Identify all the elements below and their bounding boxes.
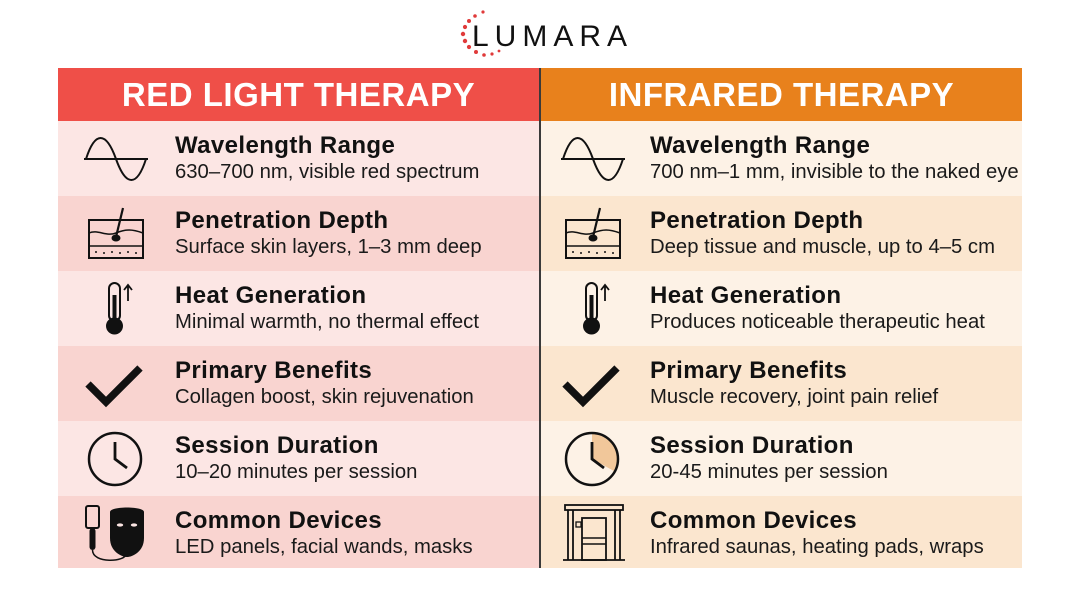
row: benefits [58, 346, 539, 421]
icon: skin [88, 208, 144, 259]
row: wavelength: 630–700 nm, visible red spectrum [175, 161, 479, 183]
row: benefits: Collagen boost, skin rejuvenation [175, 386, 474, 408]
row: penetration [541, 196, 1022, 271]
row: penetration: Surface skin layers, 1–3 mm deep [175, 236, 482, 258]
row: benefits [541, 346, 1022, 421]
icon: thermometer [583, 282, 610, 334]
row: heat [58, 271, 539, 346]
row: session: Session Duration [175, 432, 379, 459]
row: benefits: Primary Benefits [175, 357, 372, 384]
header: red light therapy: RED LIGHT THERAPY [122, 76, 475, 113]
row: session: Session Duration [650, 432, 854, 459]
row: heat: Heat Generation [175, 282, 366, 309]
icon: clock [88, 432, 142, 486]
row: heat [541, 271, 1022, 346]
row: devices [58, 496, 539, 568]
row: heat: Produces noticeable therapeutic heat [650, 311, 985, 333]
row: penetration [58, 196, 539, 271]
row: devices: Infrared saunas, heating pads, wraps [650, 536, 984, 558]
icon: skin [565, 208, 621, 259]
panel: infrared column [541, 121, 1022, 568]
row: devices [541, 496, 1022, 568]
header: infrared therapy: INFRARED THERAPY [609, 76, 954, 113]
panel: red light column [58, 121, 539, 568]
divider [539, 68, 541, 568]
header: red light therapy [58, 68, 539, 121]
logo: LUMARA [472, 20, 630, 53]
row: session: 10–20 minutes per session [175, 461, 417, 483]
row: wavelength: 700 nm–1 mm, invisible to the naked eye [650, 161, 1019, 183]
icon: wave [84, 137, 148, 181]
row: penetration: Deep tissue and muscle, up to 4–5 cm [650, 236, 995, 258]
row: benefits: Primary Benefits [650, 357, 847, 384]
header: infrared therapy [541, 68, 1022, 121]
row: devices: Common Devices [650, 507, 857, 534]
row: wavelength [58, 121, 539, 196]
row: penetration: Penetration Depth [650, 207, 863, 234]
icon: wave [561, 137, 625, 181]
row: wavelength: Wavelength Range [650, 132, 870, 159]
row: session [58, 421, 539, 496]
text: Wavelength Range [175, 132, 395, 159]
icon: sauna [563, 504, 625, 561]
row: session [541, 421, 1022, 496]
row: devices: Common Devices [175, 507, 382, 534]
icon: check [85, 365, 143, 408]
logo [460, 10, 630, 57]
icon: clock [564, 432, 620, 486]
row: heat: Heat Generation [650, 282, 841, 309]
icon: wand and mask [85, 505, 144, 561]
row: penetration: Penetration Depth [175, 207, 388, 234]
row: heat: Minimal warmth, no thermal effect [175, 311, 479, 333]
row: devices: LED panels, facial wands, masks [175, 536, 473, 558]
icon: thermometer [106, 282, 133, 334]
row: wavelength [541, 121, 1022, 196]
row: session: 20-45 minutes per session [650, 461, 888, 483]
row: benefits: Muscle recovery, joint pain relief [650, 386, 938, 408]
icon: check [562, 365, 620, 408]
